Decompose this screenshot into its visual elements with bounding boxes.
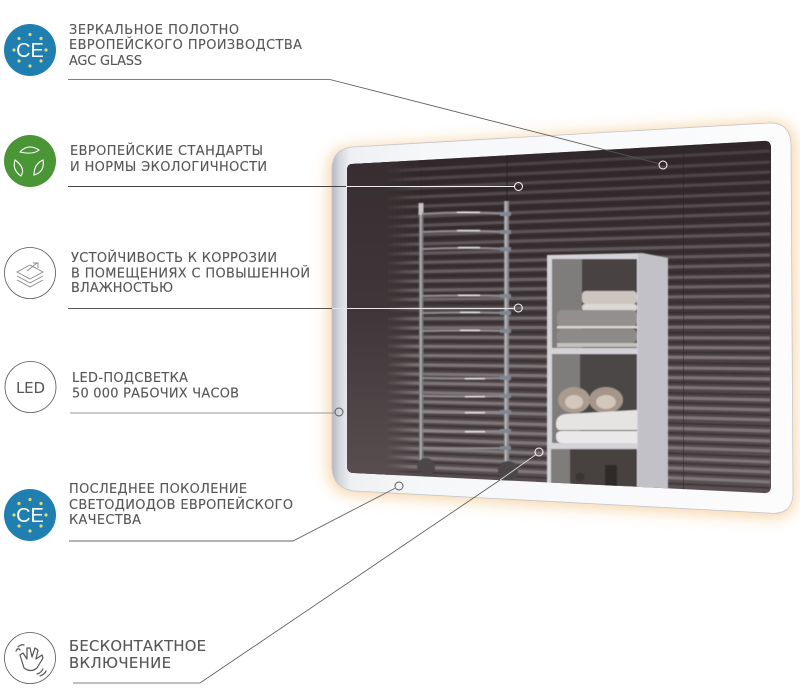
towel rail — [417, 201, 518, 481]
text: AGC glass: ЗЕРКАЛЬНОЕ ПОЛОТНО — [69, 23, 239, 38]
text: contactless switch — [69, 638, 206, 672]
text: contactless switch: БЕСКОНТАКТНОЕ — [69, 638, 206, 655]
leader line 1 — [68, 80, 667, 169]
mirror frame — [332, 123, 793, 513]
callout: latest LEDs — [4, 482, 293, 541]
leader line 3 — [68, 304, 522, 312]
folded towels — [582, 291, 637, 304]
text: AGC glass — [69, 23, 302, 69]
shelving unit — [547, 253, 668, 489]
text: corrosion resistance — [71, 250, 310, 296]
leader line 5 — [69, 482, 403, 541]
rolled towels — [558, 387, 590, 413]
text: latest LEDs — [69, 482, 293, 528]
text: eco standards: И НОРМЫ ЭКОЛОГИЧНОСТИ — [70, 160, 267, 175]
icon: CE badge: CE — [16, 505, 44, 527]
text: LED lifetime: LED-ПОДСВЕТКА — [72, 371, 188, 386]
text: LED lifetime: 50 000 РАБОЧИХ ЧАСОВ — [72, 386, 239, 402]
text: latest LEDs: СВЕТОДИОДОВ ЕВРОПЕЙСКОГО — [69, 497, 293, 513]
text: AGC glass: AGC GLASS — [69, 54, 142, 69]
text: latest LEDs: КАЧЕСТВА — [69, 513, 141, 528]
callout: contactless switch — [4, 632, 206, 684]
icon: green leaves — [4, 135, 56, 187]
icon: CE badge — [4, 24, 56, 76]
icon: layers — [4, 248, 56, 298]
callout: LED lifetime — [5, 362, 239, 412]
callout: corrosion resistance — [4, 248, 310, 298]
leader line 4 — [70, 408, 343, 416]
leader line 2 — [68, 182, 522, 190]
callout: AGC glass — [4, 23, 302, 76]
icon: LED — [5, 362, 56, 412]
icon: CE badge — [4, 489, 56, 541]
text: latest LEDs: ПОСЛЕДНЕЕ ПОКОЛЕНИЕ — [69, 482, 247, 497]
mirror with backlight — [329, 122, 795, 517]
text: eco standards — [70, 143, 267, 175]
text: AGC glass: ЕВРОПЕЙСКОГО ПРОИЗВОДСТВА — [69, 37, 302, 53]
text: contactless switch: ВКЛЮЧЕНИЕ — [69, 655, 171, 672]
callout: eco standards — [4, 135, 267, 187]
backlight glow — [329, 122, 795, 517]
icon: LED: LED — [16, 379, 45, 397]
text: eco standards: ЕВРОПЕЙСКИЕ СТАНДАРТЫ — [70, 143, 263, 159]
icon: CE badge: CE — [16, 40, 44, 62]
text: LED lifetime — [72, 371, 239, 402]
tile stripes — [347, 151, 770, 488]
text: corrosion resistance: ВЛАЖНОСТЬЮ — [71, 281, 173, 296]
text: corrosion resistance: В ПОМЕЩЕНИЯХ С ПОВЫШЕННОЙ — [71, 266, 310, 282]
mirror reflection — [347, 140, 771, 494]
leader line 6 — [73, 448, 543, 683]
text: corrosion resistance: УСТОЙЧИВОСТЬ К КОРРОЗИИ — [71, 250, 277, 266]
icon: waving hand — [4, 632, 56, 684]
